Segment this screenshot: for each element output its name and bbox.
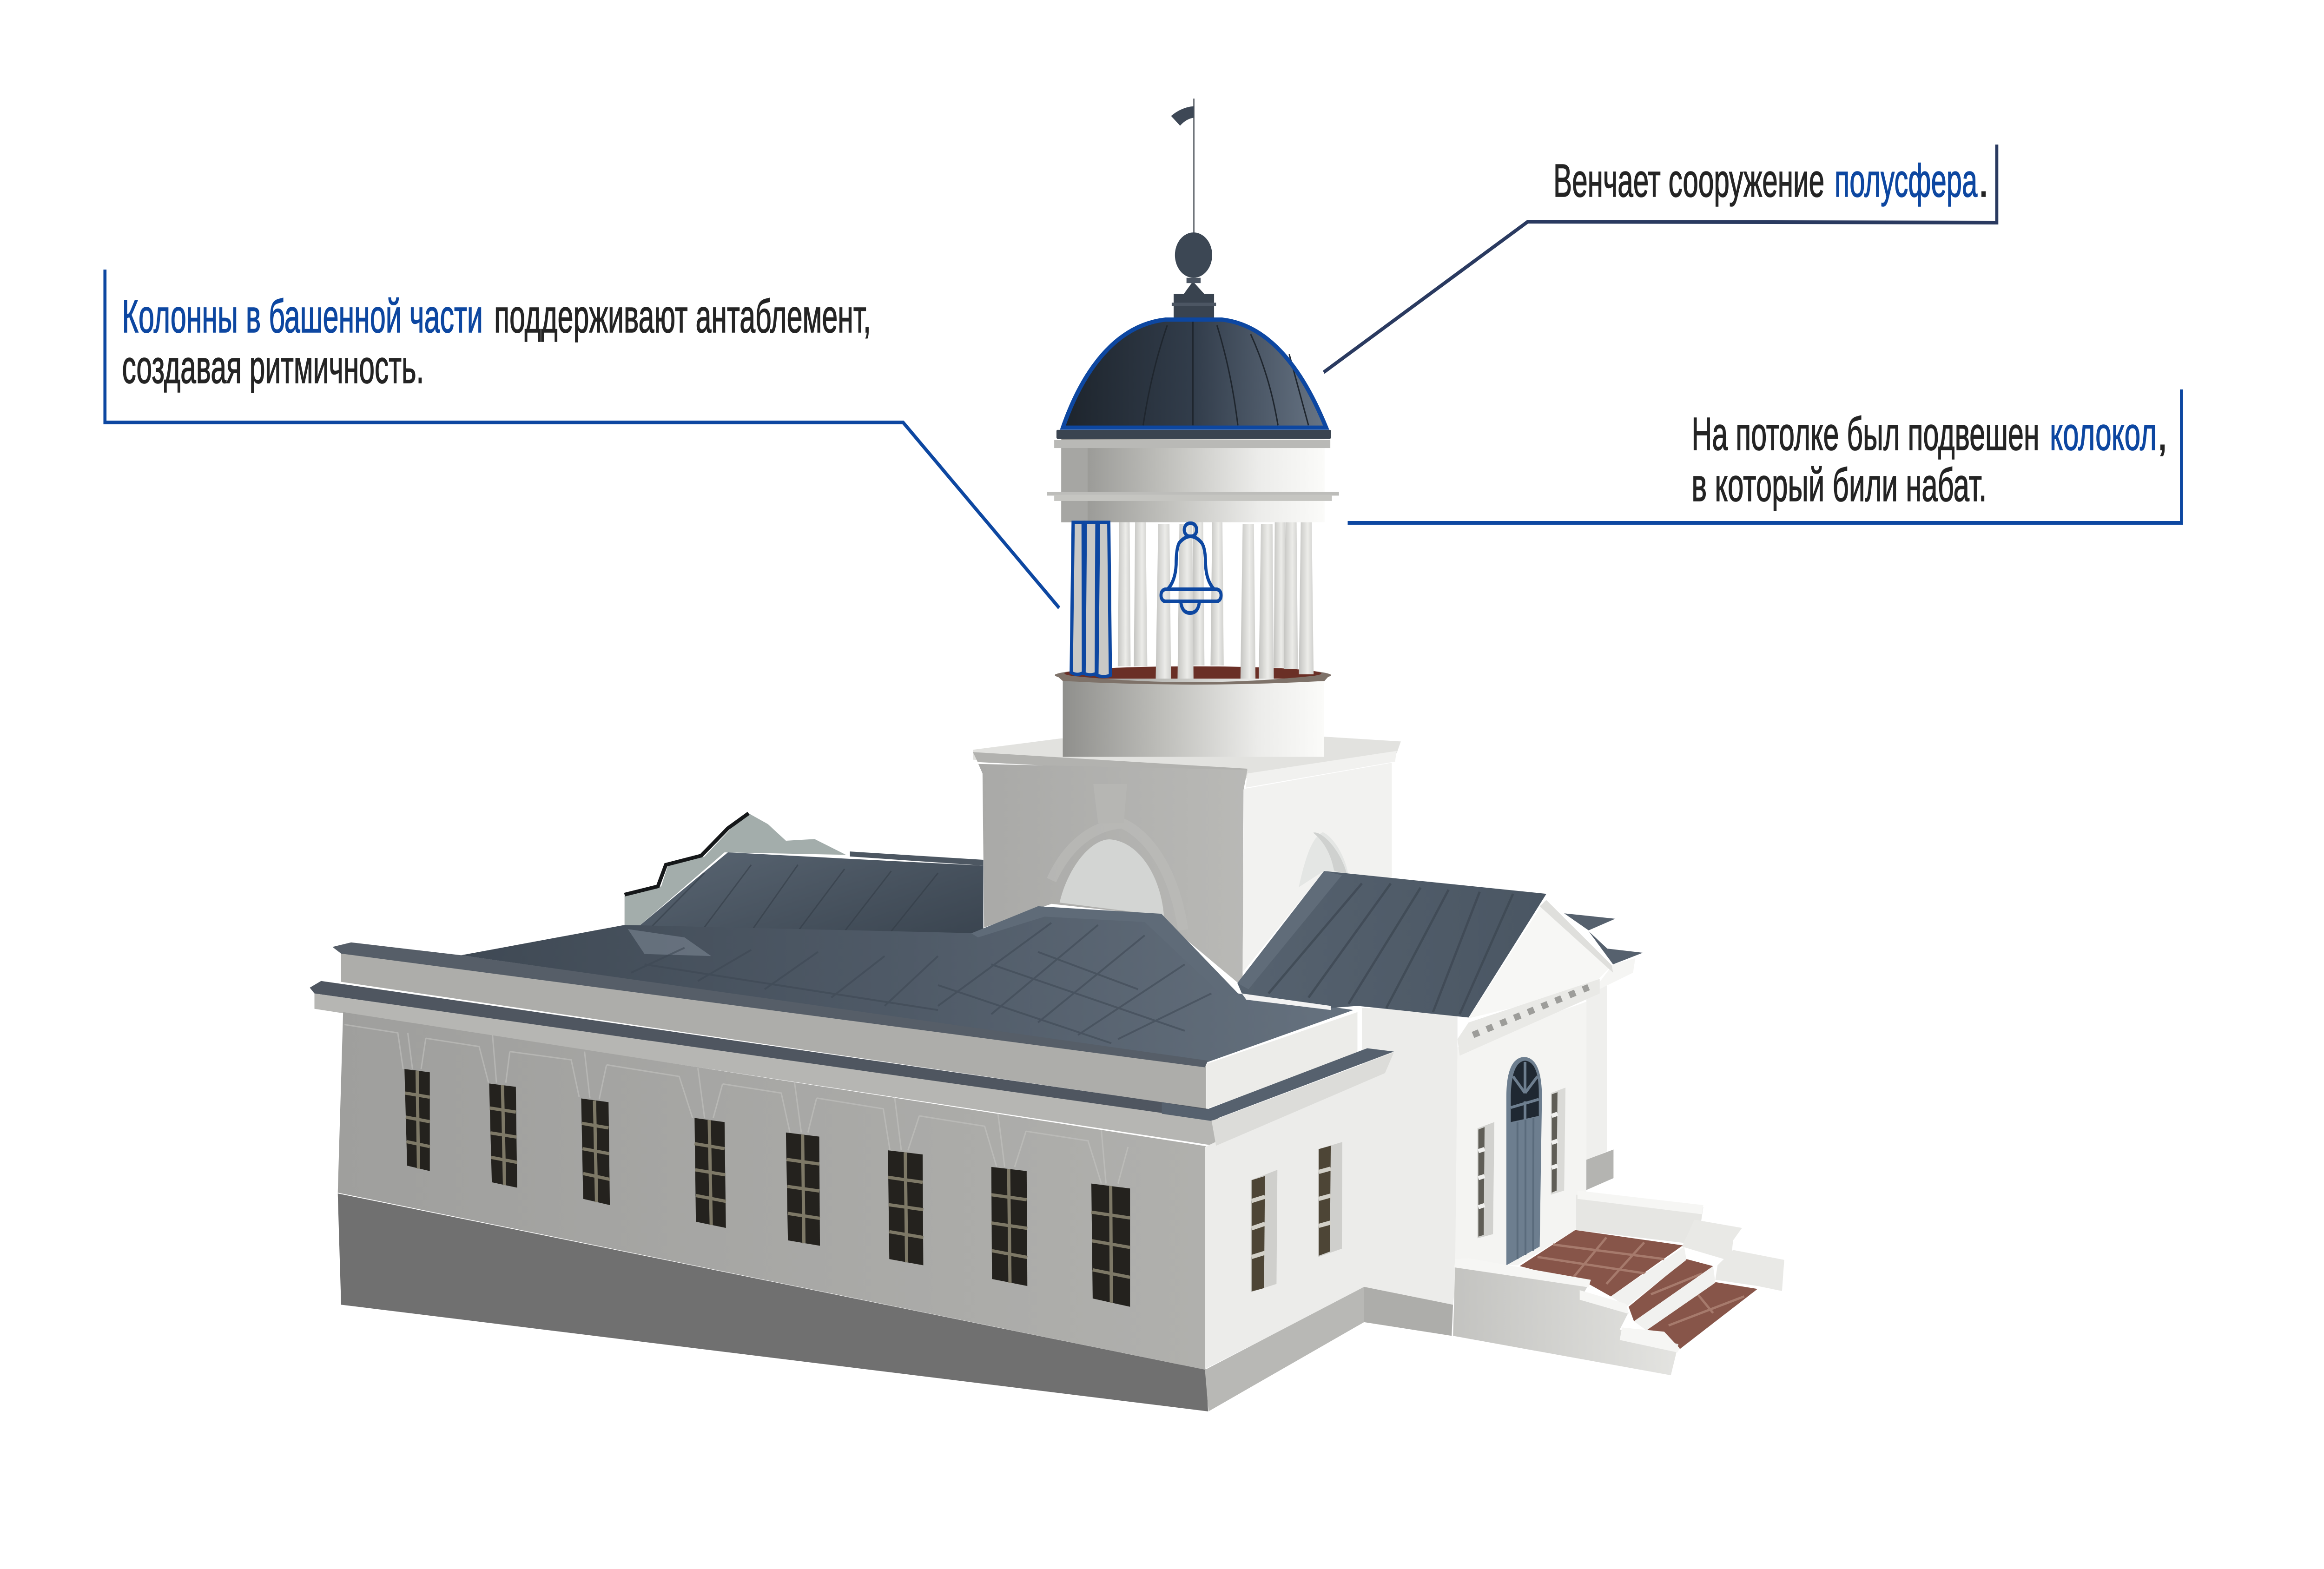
callout text: создавая ритмичность. [122,341,424,393]
plinth [338,1193,1208,1411]
brick landing and steps [1520,1230,1757,1349]
callout text: . [1978,155,1989,207]
portico front wall [1455,1002,1586,1265]
callout text: , [2157,408,2168,460]
attic band [332,943,1208,1109]
callout text: На потолке был подвешен [1691,408,2040,460]
portico back wing [1564,913,1643,1191]
callout text: колокол [2050,408,2157,460]
back roof slope [638,852,984,964]
leader line [1324,145,1997,372]
broken back gable [625,813,984,927]
bell icon [1161,523,1221,613]
callout text: Венчает сооружение [1553,155,1824,207]
callout text: Колонны в башенной части [122,290,483,343]
round drum below the columns [1063,679,1324,757]
stair front wall [1453,1265,1678,1375]
callout text: полусфера [1835,155,1978,207]
dentil cornice [1458,979,1600,1056]
side windows [1251,1142,1342,1292]
finial ball [1172,232,1216,318]
pediment [1469,900,1613,1018]
leader line [105,270,1059,608]
stairs [1453,1191,1784,1375]
main hip roof [461,906,1353,1062]
right upper attic [1206,1012,1357,1109]
cornice [310,981,1219,1146]
building illustration [310,99,1784,1411]
transept and portico [1162,871,1784,1411]
gable roof [1237,871,1546,1017]
dome outline [1063,320,1326,428]
tower base [973,674,1401,987]
pedestal slab [973,737,1401,788]
column outlines [1071,522,1110,677]
main block, long side [310,813,1353,1411]
leader line [1348,389,2181,523]
callout: dome [1063,145,1997,428]
entablature drum [1047,439,1339,522]
right face [1242,763,1392,973]
eight windows [344,1025,1130,1307]
callout text: в который били набат. [1691,459,1987,511]
low roof strip [1162,1048,1394,1121]
long wall [338,1012,1206,1370]
dome [1056,320,1331,439]
left face [978,764,1248,987]
arched door [1506,1057,1542,1265]
tower lantern with dome [1047,99,1339,684]
side wall [1205,1008,1458,1369]
side cornice [1212,1052,1394,1146]
callout text [122,290,871,393]
floor and columns [1055,522,1331,684]
flag and flagpole [1171,99,1194,233]
callout text [1691,408,2168,511]
side plinth [1205,1287,1453,1411]
portico windows [1478,1088,1565,1238]
callout: bell [1161,389,2181,613]
balcony rim [1055,674,1331,685]
callout text: поддерживают антаблемент, [494,290,871,343]
callout: columns [105,270,1110,677]
